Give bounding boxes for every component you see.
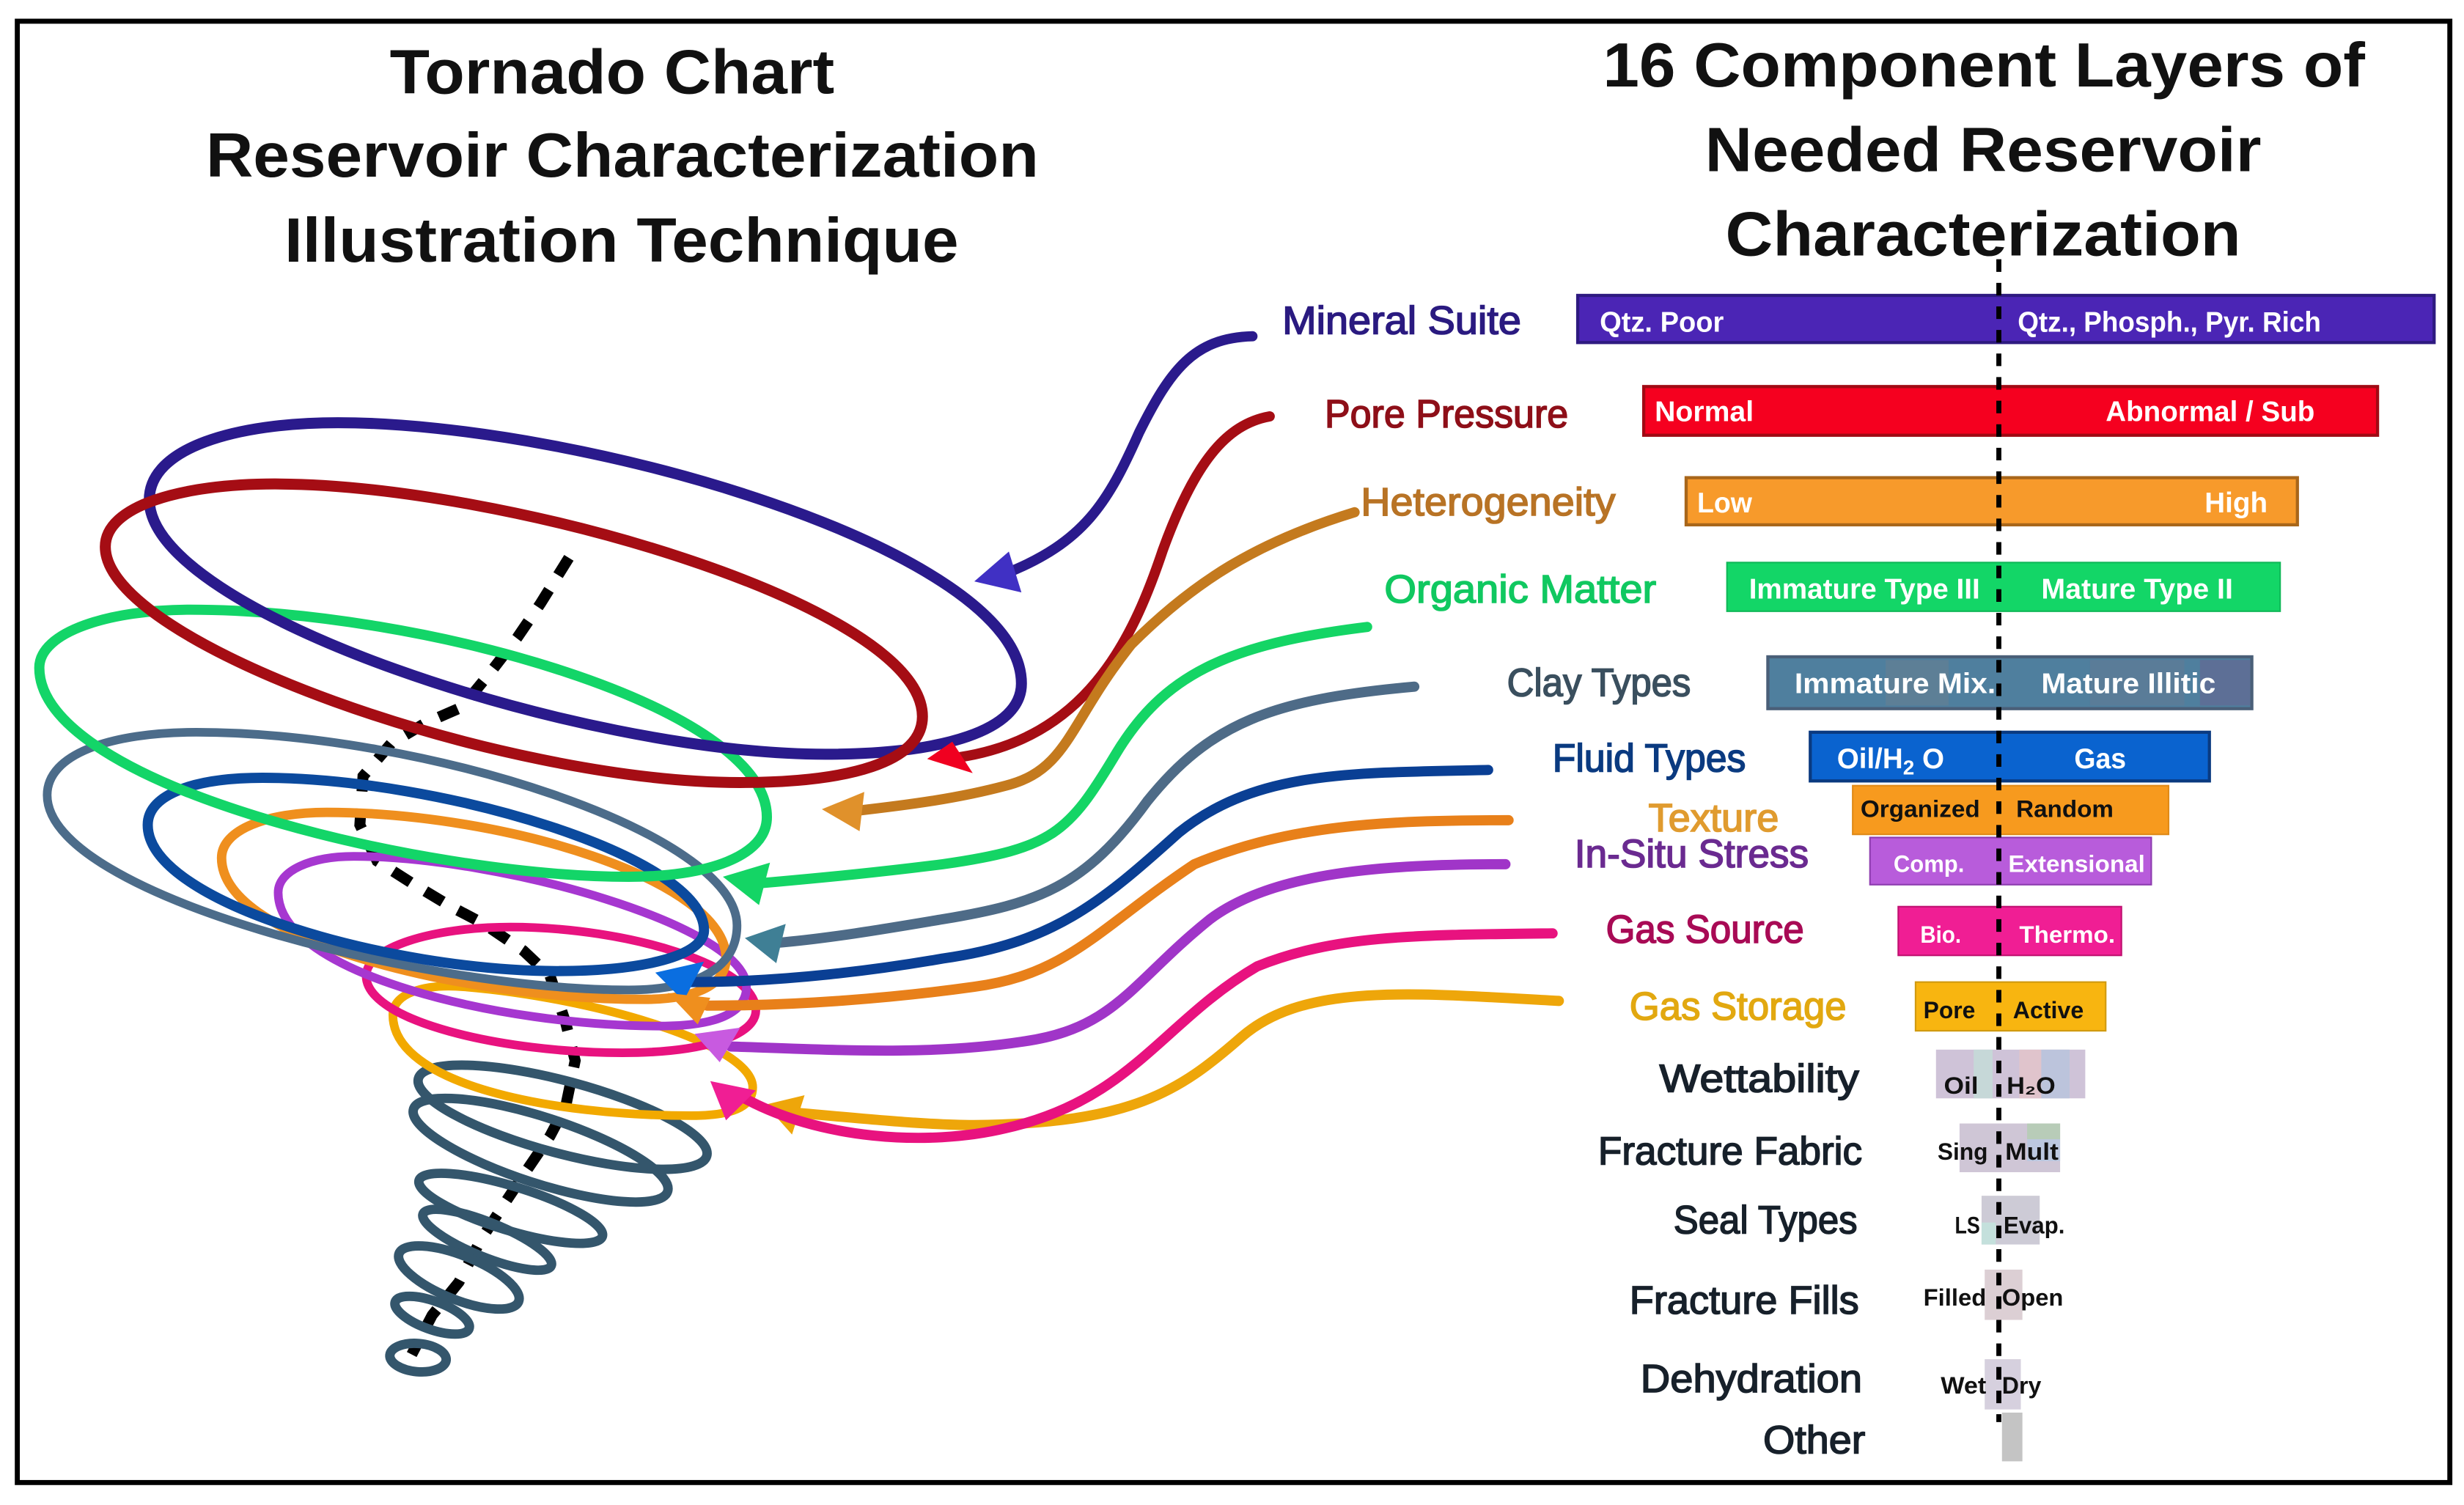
bar: fluid types [1810, 732, 2210, 781]
bar value labels: Qtz., Phosph., Pyr. Rich [2018, 306, 2321, 338]
bar value labels: Comp. [1894, 851, 1964, 877]
label: fracture fabric: Fracture Fabric [1598, 1129, 1862, 1173]
layer labels [1282, 298, 1865, 1462]
bar value labels [1600, 306, 2321, 1399]
heading: tornado chart title: Reservoir Characterization [206, 120, 1039, 191]
heading: component layers title [1603, 30, 2365, 269]
bar value labels: Mature Type II [2041, 574, 2233, 606]
label: heterogeneity: Heterogeneity [1361, 480, 1616, 524]
bar value labels: Evap. [2004, 1213, 2065, 1239]
label: fluid types: Fluid Types [1553, 736, 1746, 780]
bar: wettability [1936, 1050, 2085, 1098]
arrow: clay types [745, 687, 1414, 963]
ring: gas source [366, 927, 756, 1053]
arrow: gas storage [765, 994, 1559, 1135]
bar value labels: Immature Type III [1749, 574, 1980, 606]
label: fracture fills: Fracture Fills [1630, 1278, 1859, 1322]
tornado lower coils [389, 1044, 716, 1375]
bar value labels: Active [2013, 997, 2084, 1023]
arrow: mineral suite [974, 336, 1252, 592]
connector arrows [655, 336, 1559, 1138]
bar value labels: Pore [1924, 997, 1975, 1023]
arrow: organic matter [723, 627, 1367, 905]
ring: fluid types [148, 778, 704, 971]
label: mineral suite: Mineral Suite [1282, 298, 1521, 342]
bar value labels: Bio. [1920, 921, 1961, 948]
label: pore pressure: Pore Pressure [1325, 392, 1568, 436]
bar: heterogeneity [1686, 478, 2298, 525]
label: other: Other [1763, 1418, 1865, 1462]
bar value labels: Gas [2074, 743, 2126, 775]
heading: tornado chart title [206, 37, 1039, 276]
arrow: fluid types [655, 770, 1488, 1001]
bar value labels: Organized [1861, 796, 1980, 823]
bar: in-situ stress [1870, 837, 2151, 885]
ring: clay types [47, 732, 737, 990]
bar: organic matter [1727, 562, 2280, 611]
label: organic matter: Organic Matter [1384, 567, 1656, 611]
label: gas source: Gas Source [1606, 908, 1804, 952]
bar value labels: High [2204, 487, 2268, 519]
label: seal types: Seal Types [1674, 1199, 1858, 1243]
bar value labels: Oil [1943, 1072, 1979, 1099]
label: texture: Texture [1649, 796, 1779, 840]
label: gas storage: Gas Storage [1630, 985, 1847, 1029]
bar: fracture fills [1985, 1270, 2023, 1320]
bar value labels: Mult [2005, 1138, 2059, 1165]
bar value labels: LS [1954, 1213, 1980, 1239]
heading: component layers title: 16 Component Layers of [1603, 30, 2365, 100]
label: clay types: Clay Types [1507, 661, 1691, 705]
bar value labels: Immature Mix. [1795, 668, 1996, 699]
ring: texture [221, 812, 726, 999]
label: in-situ stress: In-Situ Stress [1575, 832, 1809, 876]
arrow: heterogeneity [822, 512, 1355, 831]
bar value labels: Low [1697, 487, 1753, 519]
bar: seal types [1982, 1196, 2040, 1245]
arrow: pore pressure [927, 416, 1270, 773]
ring: gas storage [393, 986, 753, 1116]
bar: clay types [1768, 657, 2252, 709]
bar: pore pressure [1644, 386, 2377, 435]
center dashed line [1998, 260, 2000, 1422]
bar value labels: Open [2002, 1284, 2063, 1311]
tornado illustration [40, 423, 1021, 1375]
ring: mineral suite [150, 423, 1021, 754]
ring: organic matter [40, 610, 767, 877]
bar value labels: Abnormal / Sub [2106, 396, 2314, 427]
bar value labels: Dry [2002, 1372, 2041, 1399]
bar: texture [1853, 786, 2169, 834]
bar value labels: Filled [1924, 1284, 1986, 1311]
heading: component layers title: Needed Reservoir [1705, 115, 2261, 185]
arrow: texture [668, 820, 1509, 1025]
bar value labels: Mature Illitic [2041, 668, 2215, 699]
bar value labels: Wet [1941, 1372, 1987, 1399]
bar: gas source [1898, 907, 2122, 955]
ring: pore pressure [106, 484, 922, 782]
heading: tornado chart title: Tornado Chart [390, 37, 834, 108]
bar: gas storage [1916, 982, 2106, 1031]
bar value labels: H₂O [2007, 1072, 2056, 1099]
tornado bar chart [1578, 295, 2434, 1461]
bar: mineral suite [1578, 295, 2434, 342]
bar: fracture fabric [1960, 1124, 2060, 1172]
bar value labels: 2 [1903, 757, 1914, 779]
tornado dashed axis [360, 558, 575, 1355]
bar value labels: Random [2016, 796, 2114, 823]
bar value labels: Thermo. [2019, 921, 2115, 948]
bar value labels: Normal [1655, 396, 1754, 427]
ring: in-situ stress [278, 856, 746, 1026]
bar value labels: Oil/H [1837, 743, 1903, 775]
bar value labels: Qtz. Poor [1600, 306, 1724, 338]
heading: component layers title: Characterization [1726, 199, 2241, 269]
bar value labels: O [1914, 743, 1944, 775]
bar value labels: Sing [1938, 1138, 1988, 1165]
arrow: gas source [710, 933, 1553, 1138]
label: wettability: Wettability [1660, 1057, 1859, 1101]
bar: dehydration [1985, 1359, 2021, 1410]
label: dehydration: Dehydration [1641, 1357, 1862, 1401]
bar: other [2002, 1413, 2023, 1461]
arrow: in-situ stress [694, 864, 1505, 1062]
heading: tornado chart title: Illustration Technique [284, 205, 959, 276]
bar value labels: Extensional [2008, 851, 2145, 877]
